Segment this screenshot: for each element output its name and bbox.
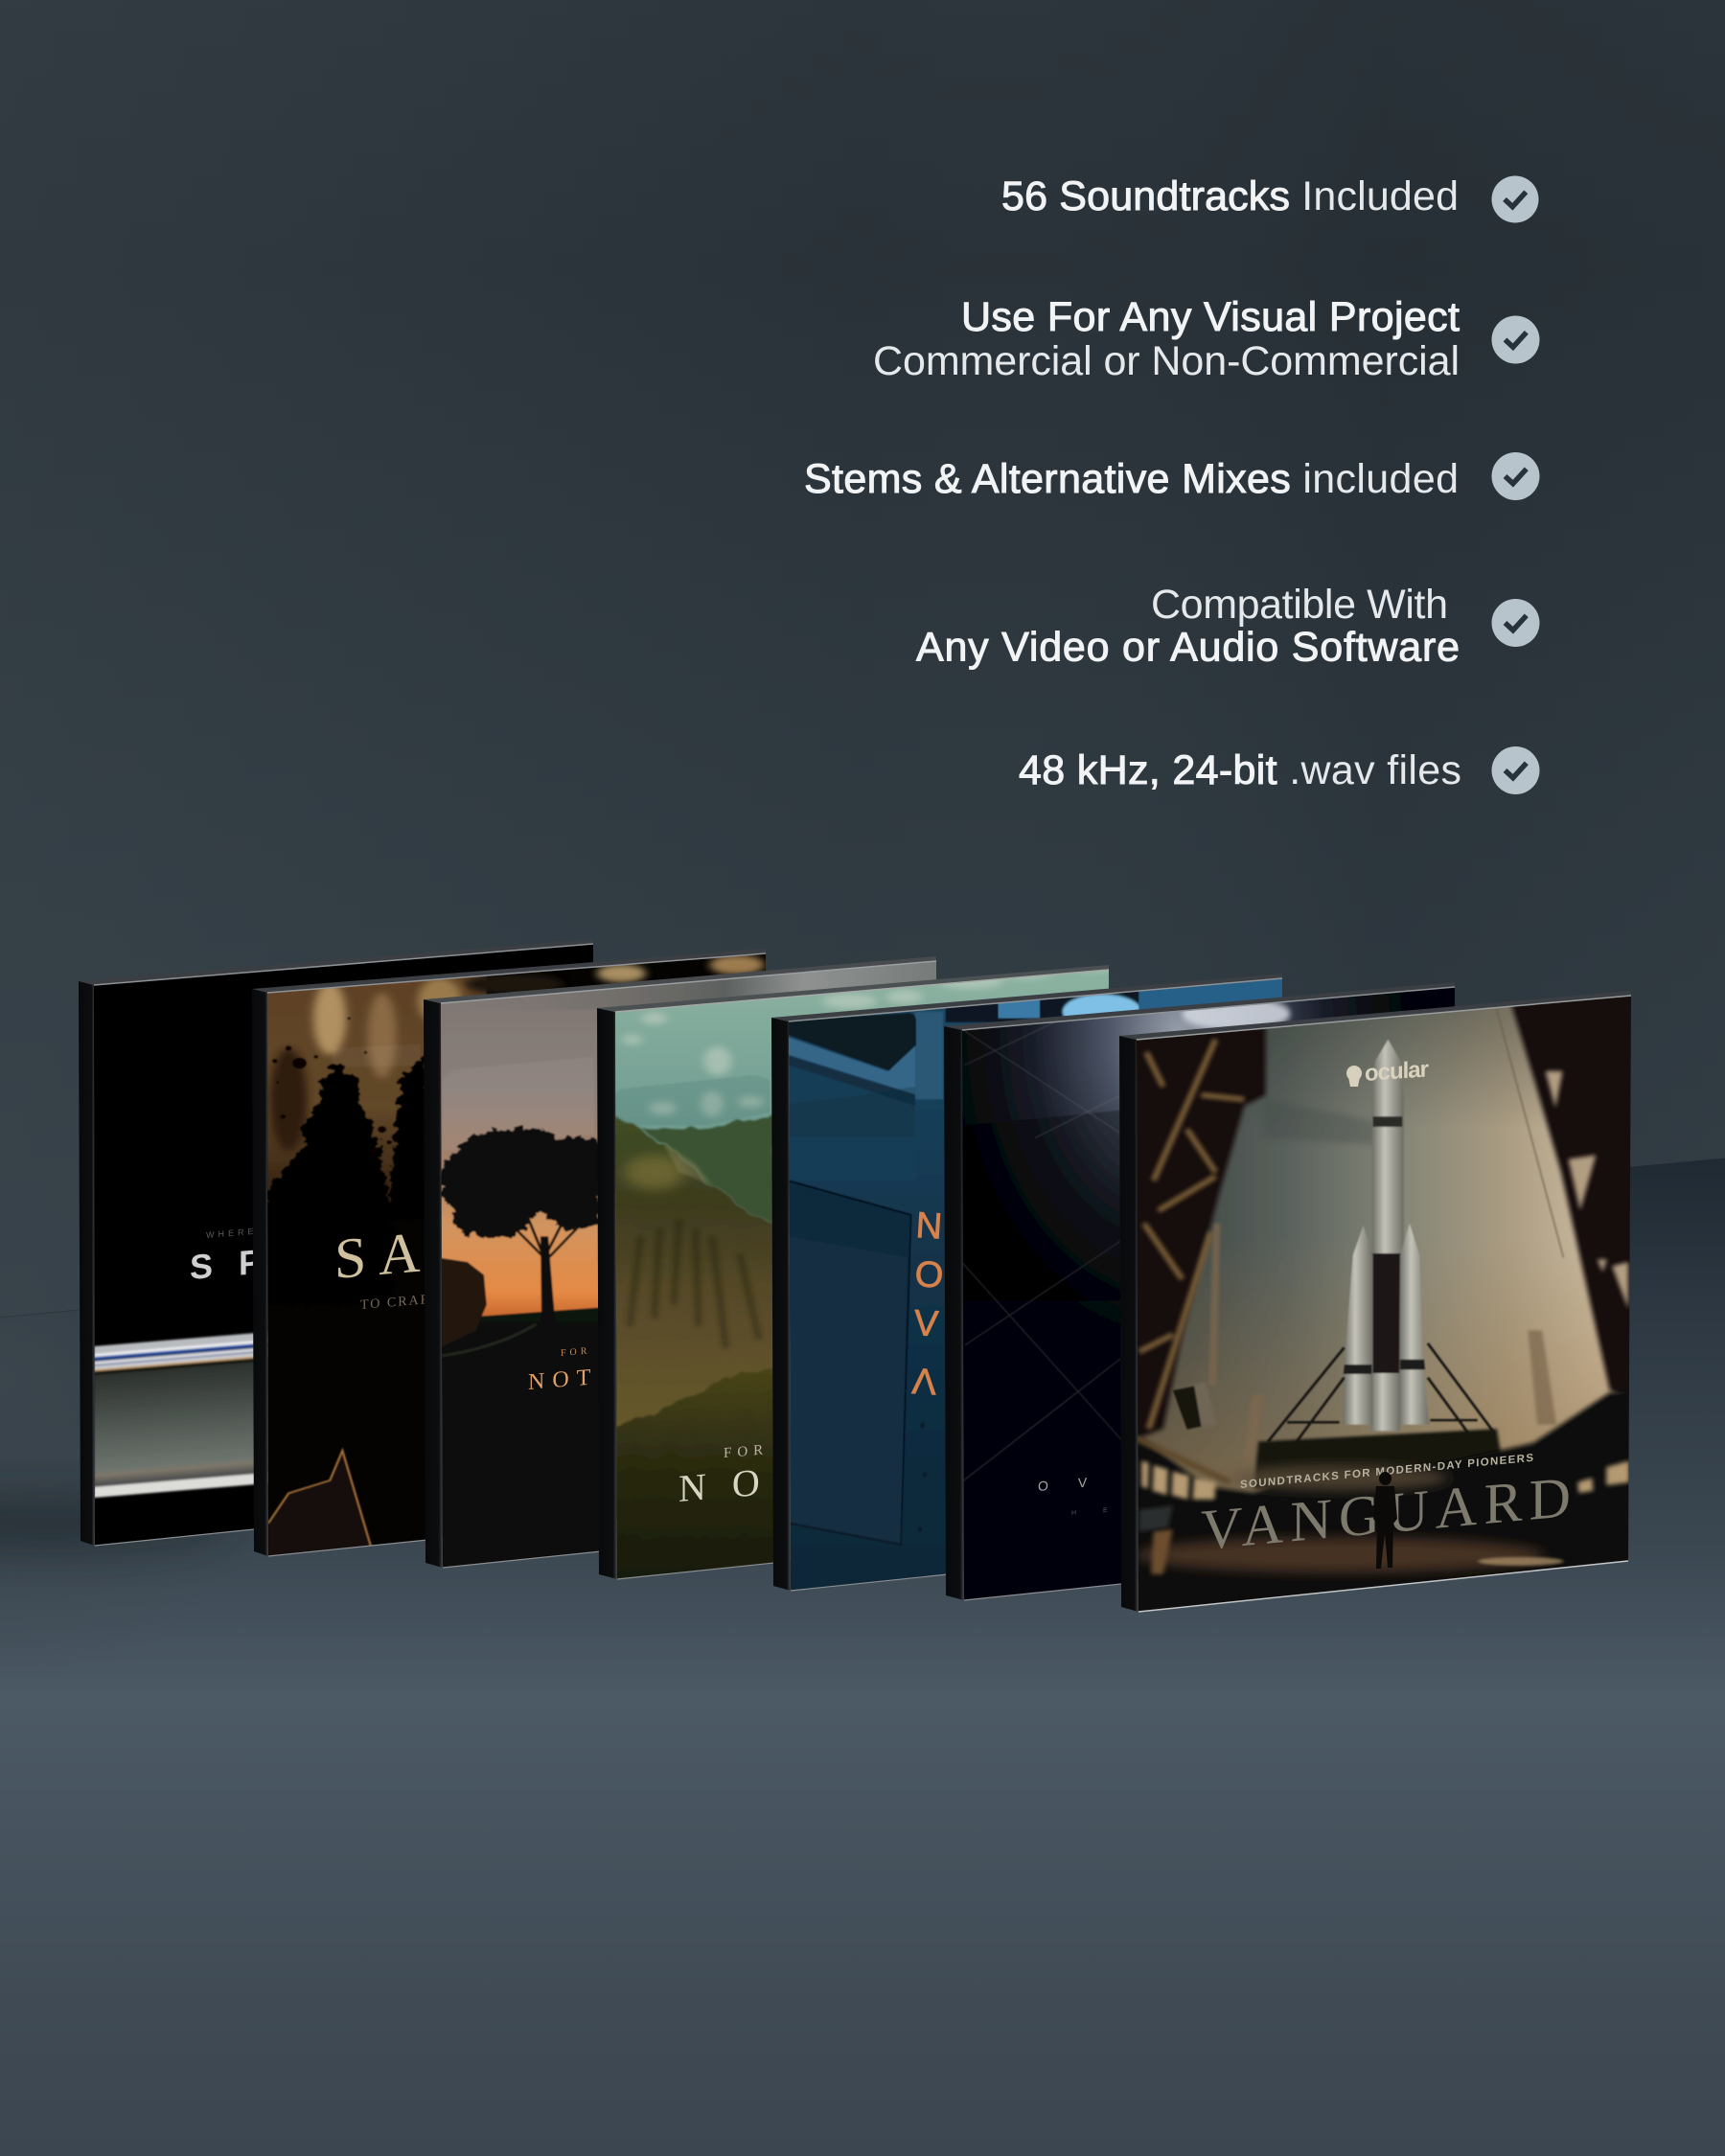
album case 2: amber silhouette cover: TO CRAF [360,1293,429,1313]
album case 4: green mountains cover [597,946,1130,1587]
sky [1130,988,1640,1621]
feature: use for any visual project: Commercial or Non-Commercial [873,338,1460,384]
distant cranes [1208,1224,1556,1463]
feature list [804,173,1539,794]
album case 5: blue concrete NOVA cover [771,974,1299,1617]
recessed panel [788,1181,911,1545]
cover title: NOVA: N [914,1205,943,1248]
album case 6: dark geometric cover: HEU [1071,1502,1166,1517]
cover text: WHERE [206,1227,257,1240]
feature: use for any visual project [873,294,1539,384]
album case 3: sunset tree cover: NOT [528,1365,598,1395]
album case 1: black cover with stripes [77,929,613,1562]
cover title: NOVA [910,1211,942,1395]
dark silhouette [267,1054,425,1211]
album case 4: green mountains cover: NO [678,1458,786,1510]
album case 7: Vanguard rocket cover [1119,988,1640,1621]
album case 6: dark geometric cover [944,975,1498,1617]
lower dark structures [1130,1390,1640,1621]
floor [0,1158,1725,2156]
rocket [1344,1040,1429,1431]
feature: 56 soundtracks included: 56 Soundtracks Included [1001,173,1459,219]
foreground hill [617,1368,773,1579]
album case 3: sunset tree cover [424,956,971,1578]
tagline: SOUNDTRACKS FOR MODERN-DAY PIONEERS [1240,1453,1533,1491]
feature: compatible with any software: Compatible With [1151,582,1448,628]
feature: stems and alternative mixes: Stems & Alternative Mixes included [804,456,1459,502]
launch frame [1268,1343,1494,1441]
album case 2: amber silhouette cover [252,939,776,1571]
glowing crack artwork [268,1451,371,1562]
feature: compatible with any software: Any Video or Audio Software [916,625,1460,671]
feature: compatible with any software [916,582,1539,671]
clouds [622,958,1125,1116]
back ridge [641,1113,772,1225]
glowing windows [1141,1461,1629,1500]
main slope [615,1115,772,1428]
man silhouette [1373,1472,1397,1569]
title: Vanguard: VANGUARD [1201,1465,1571,1563]
cover text: OV [1038,1472,1116,1494]
diagonal lines [961,1022,1121,1482]
cover text: SA [334,1220,433,1292]
album case 1: black cover with stripes: SP [190,1240,288,1287]
cover text: FOR [561,1345,590,1359]
cover title: NOVA: V [912,1303,940,1345]
tree [440,1128,608,1239]
top windows [945,991,1139,1023]
background wall [0,0,1725,1342]
feature: use for any visual project: Use For Any Visual Project [961,294,1460,340]
cover text: FOR [724,1442,769,1461]
dark upper panel [788,1013,916,1071]
feature: 48 kHz 24-bit wav files: 48 kHz, 24-bit .wav files [1019,747,1461,793]
left gantry [1130,1026,1266,1441]
stripe band artwork [94,1332,268,1499]
album row [77,929,1640,1621]
ocular logo: ocular [1365,1056,1429,1087]
cover title: NOVA: Λ [910,1362,938,1404]
cover title: NOVA: O [913,1254,945,1296]
right gantry [1506,988,1640,1403]
